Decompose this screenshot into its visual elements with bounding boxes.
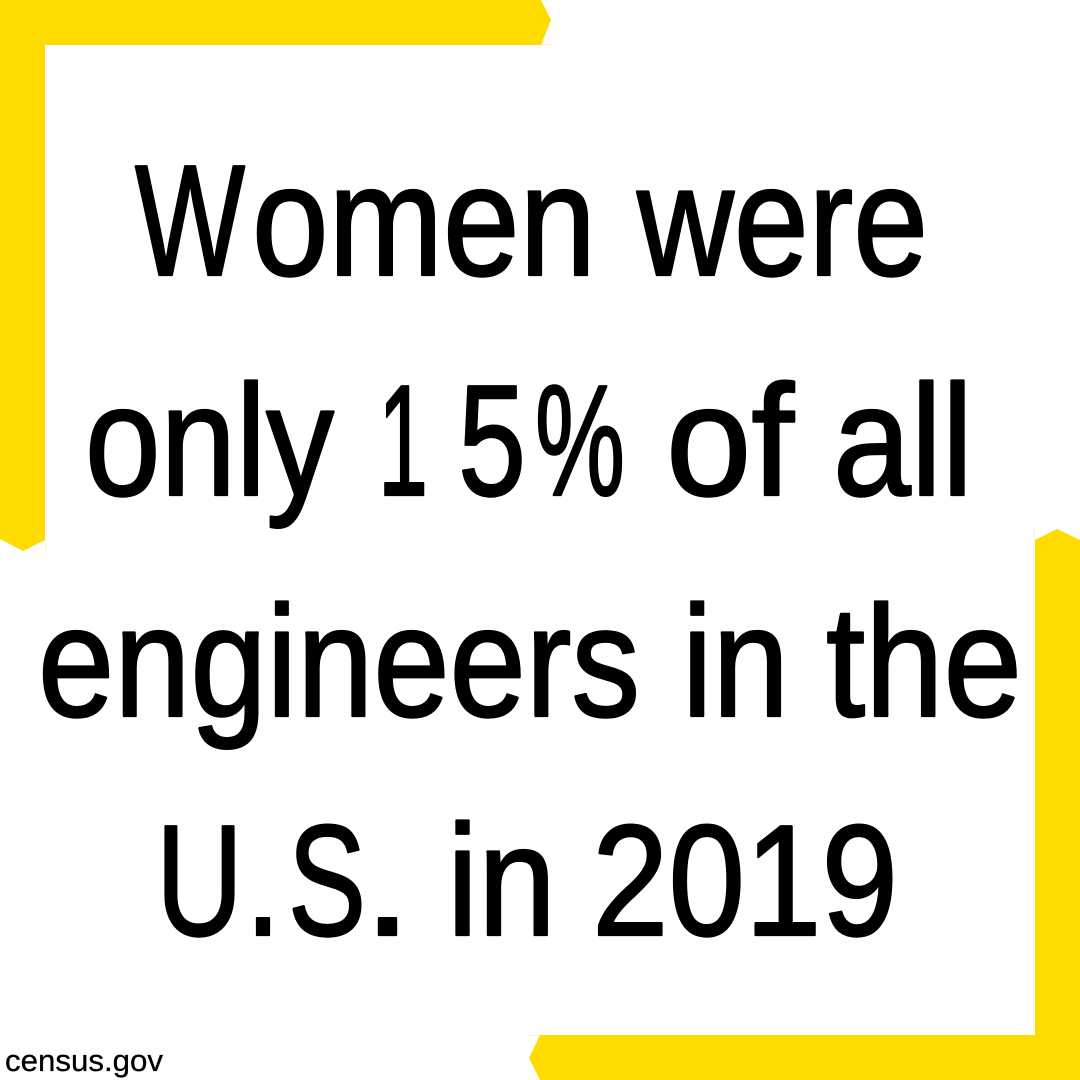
headline statement: engineers [38,574,640,750]
headline statement: S [288,793,366,969]
headline statement: all [833,353,973,529]
headline statement: 2019 [592,793,898,969]
headline statement [38,133,1022,969]
headline statement: in [447,793,556,969]
headline statement: in [682,574,789,750]
headline statement: . [363,793,412,969]
headline statement: W [135,133,245,309]
headline statement: of [666,353,795,529]
headline statement: % [535,353,625,529]
headline statement: omen [252,133,596,309]
headline statement: 1 [378,353,428,529]
yellow corner frame: bottom right [529,529,1080,1080]
headline statement: the [826,574,1022,750]
headline statement: were [636,133,928,309]
headline statement: . [245,793,281,969]
yellow corner frame: top left [0,0,551,551]
headline statement: only [85,353,334,529]
headline statement: 5 [458,353,526,529]
source: census.gov: census.gov [5,1043,163,1078]
headline statement: U [156,793,243,969]
